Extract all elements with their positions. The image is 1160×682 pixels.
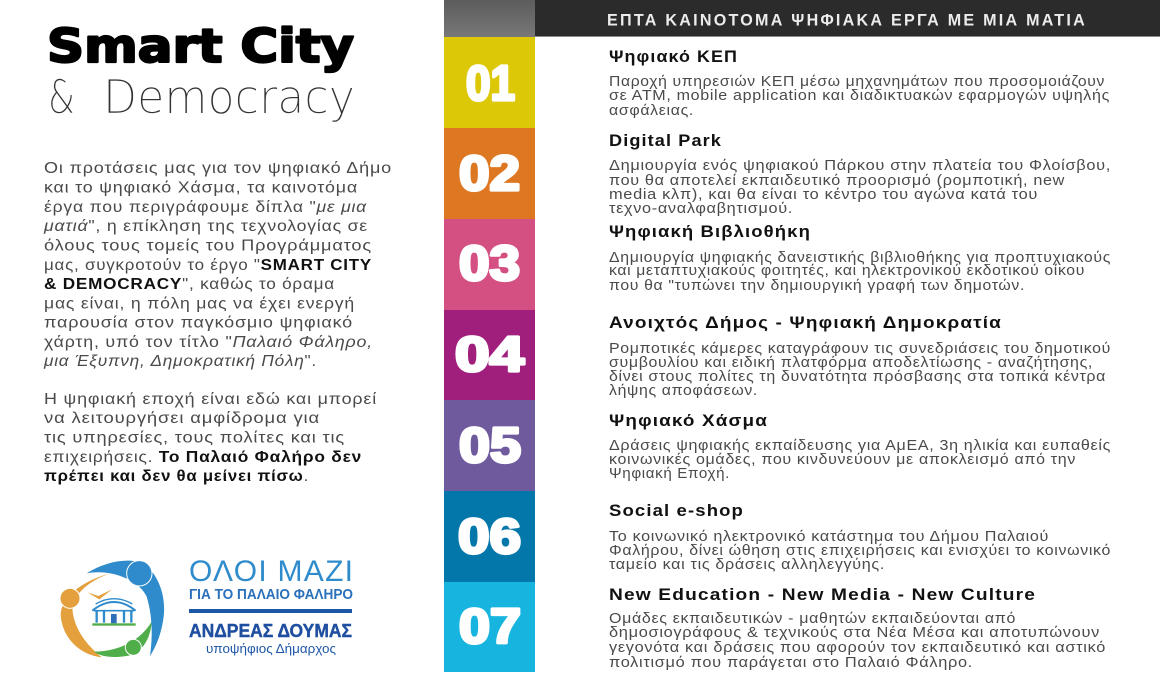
number block 05: [444, 400, 535, 491]
item 04: Ανοιχτός Δήμος - Ψηφιακή Δημοκρατία: συμβουλίου και ειδική πλατφόρμα αποδελτίωσης - αναζήτησης,: [609, 355, 1093, 371]
item 04: Ανοιχτός Δήμος - Ψηφιακή Δημοκρατία: [609, 314, 1111, 399]
number block 01: [444, 37, 535, 128]
text block: intro paragraph: ματιά ", η επίκληση της τεχνολογίας σε: [43, 218, 368, 235]
text block: closing paragraph: τις υπηρεσίες, τους πολίτες και τις: [44, 430, 345, 446]
item 04: Ανοιχτός Δήμος - Ψηφιακή Δημοκρατία: λήψης αποφάσεων.: [609, 383, 758, 399]
item 03: Ψηφιακή Βιβλιοθήκη: και μεταπτυχιακούς φοιτητές, και ηλεκτρονικού εκδοτικού οίκου: [609, 263, 1085, 279]
number block 06: 06: [458, 510, 521, 564]
item 04: Ανοιχτός Δήμος - Ψηφιακή Δημοκρατία: δίνει στους πολίτες τη δυνατότητα πρόσβασης στα τοπικά κέντρα: [609, 369, 1106, 385]
logo text: ΓΙΑ ΤΟ ΠΑΛΑΙΟ ΦΑΛΗΡΟ: ΓΙΑ ΤΟ ΠΑΛΑΙΟ ΦΑΛΗΡΟ: [189, 586, 353, 603]
item 07: New Education - New Media - New Culture: Ομάδες εκπαιδευτικών - μαθητών εκπαιδεύονται από: [609, 611, 1016, 627]
number block 03: 03: [459, 237, 520, 291]
text block: intro paragraph: μας είναι, η πόλη μας να έχει ενεργή: [44, 296, 355, 312]
header text: ΕΠΤΑ ΚΑΙΝΟΤΟΜΑ ΨΗΦΙΑΚΑ ΕΡΓΑ ΜΕ ΜΙΑ ΜΑΤΙΑ: [607, 12, 1087, 30]
item 07: New Education - New Media - New Culture: γεγονότα και δράσεις που αφορούν τον εκπαιδευτικό και αστικό: [609, 640, 1106, 656]
item 07: New Education - New Media - New Culture: New Education - New Media - New Culture: [609, 586, 1036, 604]
text block: intro paragraph: όλους τους τομείς του Προγράμματος: [44, 238, 372, 254]
item 06: Social e-shop: Το κοινωνικό ηλεκτρονικό κατάστημα του Δήμου Παλαιού: [609, 529, 1049, 545]
item 07: New Education - New Media - New Culture: δημοσιογράφους & τεχνικούς στα Νέα Μέσα και αποτυπώνουν: [609, 625, 1100, 641]
subheading: & Democracy: Democracy: [103, 70, 355, 124]
item 02: Digital Park: Digital Park: [609, 132, 722, 150]
text block: intro paragraph: χάρτη, υπό τον τίτλο " Παλαιό Φάληρο,: [44, 334, 373, 351]
item 06: Social e-shop: [609, 502, 1111, 573]
title: Smart City & Democracy: [47, 19, 355, 124]
text block: intro paragraph: παρουσία στον παγκόσμιο ψηφιακό: [44, 314, 353, 332]
item 05: Ψηφιακό Χάσμα: Δράσεις ψηφιακής εκπαίδευσης για ΑμΕΑ, 3η ηλικία και ευπαθείς: [609, 438, 1111, 454]
logo: Όλοι Μαζί: [60, 555, 353, 657]
subheading: & Democracy: &: [48, 70, 75, 124]
item 07: New Education - New Media - New Culture: πολιτισμό που παράγεται στο Παλαιό Φάληρο.: [609, 655, 973, 671]
number block 05: 05: [459, 419, 521, 473]
text block: intro paragraph: μας, συγκροτούν το έργο " SMART CITY: [44, 257, 372, 274]
item 05: Ψηφιακό Χάσμα: Ψηφιακό Χάσμα: [609, 412, 768, 430]
text block: intro paragraph: [43, 160, 392, 370]
item 06: Social e-shop: ταμείο και τις δράσεις αλληλεγγύης.: [609, 557, 885, 573]
item 01: Ψηφιακό ΚΕΠ: Παροχή υπηρεσιών ΚΕΠ μέσω μηχανημάτων που προσομοιάζουν: [609, 74, 1105, 90]
item 06: Social e-shop: Social e-shop: [609, 502, 744, 520]
number block 03: [444, 219, 535, 310]
text block: closing paragraph: πρέπει και δεν θα μείνει πίσω .: [44, 468, 309, 485]
logo text: ΑΝΔΡΕΑΣ ΔΟΥΜΑΣ: ΑΝΔΡΕΑΣ ΔΟΥΜΑΣ: [189, 621, 352, 641]
item 02: Digital Park: που θα αποτελεί εκπαιδευτικό προορισμό (ρομποτική, new: [609, 173, 1065, 189]
text block: closing paragraph: να λειτουργήσει αμφίδρομα για: [44, 410, 320, 427]
number block 02: [444, 128, 535, 219]
item 03: Ψηφιακή Βιβλιοθήκη: Ψηφιακή Βιβλιοθήκη: [609, 223, 811, 241]
item 01: Ψηφιακό ΚΕΠ: Ψηφιακό ΚΕΠ: [609, 48, 738, 66]
item 02: Digital Park: [609, 132, 1111, 217]
item 01: Ψηφιακό ΚΕΠ: [609, 48, 1110, 119]
text block: intro paragraph: & DEMOCRACY ", καθώς το όραμα: [44, 276, 335, 293]
item 02: Digital Park: media κλπ), και θα είναι το κέντρο του αγώνα κατά του: [609, 187, 1038, 203]
number block 06: [444, 491, 535, 582]
item 05: Ψηφιακό Χάσμα: Ψηφιακή Εποχή.: [609, 466, 730, 482]
text block: intro paragraph: μια Έξυπνη, Δημοκρατική Πόλη ".: [43, 353, 317, 370]
item 01: Ψηφιακό ΚΕΠ: ασφάλειας.: [609, 103, 694, 119]
text block: closing paragraph: [44, 391, 377, 485]
item 06: Social e-shop: Φαλήρου, δίνει ώθηση στις επιχειρήσεις και ενισχύει το κοινωνικό: [609, 543, 1111, 559]
logo text: ΟΛΟΙ ΜΑΖΙ: ΟΛΟΙ ΜΑΖΙ: [189, 555, 353, 588]
header bar: [444, 0, 1160, 37]
icon: circular emblem with town hall: [60, 561, 164, 657]
item 03: Ψηφιακή Βιβλιοθήκη: [609, 223, 1111, 294]
number block 02: 02: [459, 147, 520, 201]
item 02: Digital Park: τεχνο-αναλφαβητισμού.: [609, 201, 793, 217]
item 05: Ψηφιακό Χάσμα: [609, 412, 1111, 482]
text block: intro paragraph: έργα που περιγράφουμε δίπλα " με μια: [44, 199, 368, 216]
logo text: υποψήφιος Δήμαρχος: υποψήφιος Δήμαρχος: [206, 641, 336, 656]
number block 04: [444, 310, 535, 400]
item 04: Ανοιχτός Δήμος - Ψηφιακή Δημοκρατία: Ανοιχτός Δήμος - Ψηφιακή Δημοκρατία: [609, 314, 1002, 332]
number block 07: [444, 582, 535, 672]
number block 01: 01: [466, 57, 515, 111]
heading: Smart City: Smart City: [47, 19, 354, 73]
number block 07: 07: [459, 600, 521, 654]
item 07: New Education - New Media - New Culture: [609, 586, 1106, 671]
item 03: Ψηφιακή Βιβλιοθήκη: που θα "τυπώνει την δημιουργική γραφή των δημοτών.: [609, 278, 1025, 294]
text block: closing paragraph: επιχειρήσεις. Το Παλαιό Φαλήρο δεν: [44, 449, 362, 466]
item 01: Ψηφιακό ΚΕΠ: σε ΑΤΜ, mobile application και διαδικτυακών εφαρμογών υψηλής: [609, 88, 1110, 104]
item 02: Digital Park: Δημιουργία ενός ψηφιακού Πάρκου στην πλατεία του Φλοίσβου,: [609, 158, 1111, 174]
item 04: Ανοιχτός Δήμος - Ψηφιακή Δημοκρατία: Ρομποτικές κάμερες καταγράφουν τις συνεδριάσεις του δημοτικού: [609, 341, 1111, 357]
item 05: Ψηφιακό Χάσμα: κοινωνικές ομάδες, που κινδυνεύουν με αποκλεισμό από την: [609, 452, 1076, 468]
item 03: Ψηφιακή Βιβλιοθήκη: Δημιουργία ψηφιακής δανειστικής βιβλιοθήκης για προπτυχιακούς: [609, 250, 1111, 266]
number block 04: 04: [455, 328, 524, 382]
text block: intro paragraph: και το ψηφιακό Χάσμα, τα καινοτόμα: [44, 180, 358, 196]
text block: intro paragraph: Οι προτάσεις μας για τον ψηφιακό Δήμο: [44, 160, 392, 177]
text block: closing paragraph: Η ψηφιακή εποχή είναι εδώ και μπορεί: [44, 391, 377, 408]
